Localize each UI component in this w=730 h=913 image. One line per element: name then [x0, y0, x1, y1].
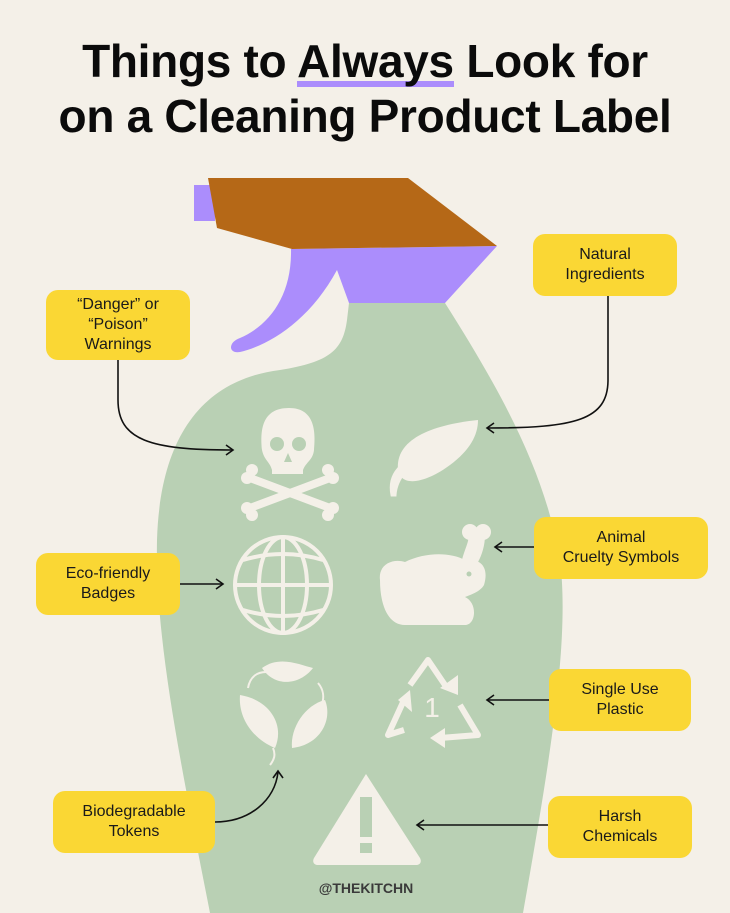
callout: single use plastic: Single Use: [581, 681, 659, 698]
callout: single use plastic: [549, 669, 691, 731]
callout: natural ingredients: Natural: [579, 246, 631, 263]
bottle body: [157, 303, 563, 913]
callout: harsh chemicals: [548, 796, 692, 858]
icon: leaf: [391, 420, 478, 495]
title: Things to Always Look for: [82, 35, 648, 87]
callout: eco-friendly: [36, 553, 180, 615]
icons: 1: [424, 692, 440, 723]
callout: eco-friendly: Badges: [81, 585, 135, 602]
icon: globe: [235, 537, 331, 633]
icon: skull and crossbones: [241, 408, 339, 521]
title: [59, 35, 671, 142]
callout: natural ingredients: [533, 234, 677, 296]
callout: single use plastic: Plastic: [596, 701, 644, 718]
callout: animal cruelty: Cruelty Symbols: [563, 549, 679, 566]
icon: biodegradable leaves: [240, 661, 327, 748]
callout: harsh chemicals: Chemicals: [583, 828, 657, 845]
callout: danger: “Poison”: [88, 316, 148, 333]
callout: biodegradable: [53, 791, 215, 853]
callout: danger: “Danger” or: [77, 296, 159, 313]
icon: warning triangle: [313, 774, 421, 865]
arrows: [118, 296, 608, 830]
callout: biodegradable: Biodegradable: [82, 803, 186, 820]
credit: @THEKITCHN: [319, 880, 413, 896]
callout: eco-friendly: Eco-friendly: [66, 565, 150, 582]
icon: recycle 1: [388, 660, 478, 738]
callout: animal cruelty: [534, 517, 708, 579]
callout: danger: [46, 290, 190, 360]
callout: animal cruelty: Animal: [597, 529, 645, 546]
callout: danger: Warnings: [84, 336, 151, 353]
callout: natural ingredients: Ingredients: [565, 266, 645, 283]
callout: harsh chemicals: Harsh: [599, 808, 641, 825]
icon: bunny: [380, 524, 491, 625]
nozzle brown: [208, 178, 497, 249]
trigger nozzle purple: [194, 185, 215, 221]
title: on a Cleaning Product Label: [59, 90, 671, 142]
callout: biodegradable: Tokens: [109, 823, 159, 840]
